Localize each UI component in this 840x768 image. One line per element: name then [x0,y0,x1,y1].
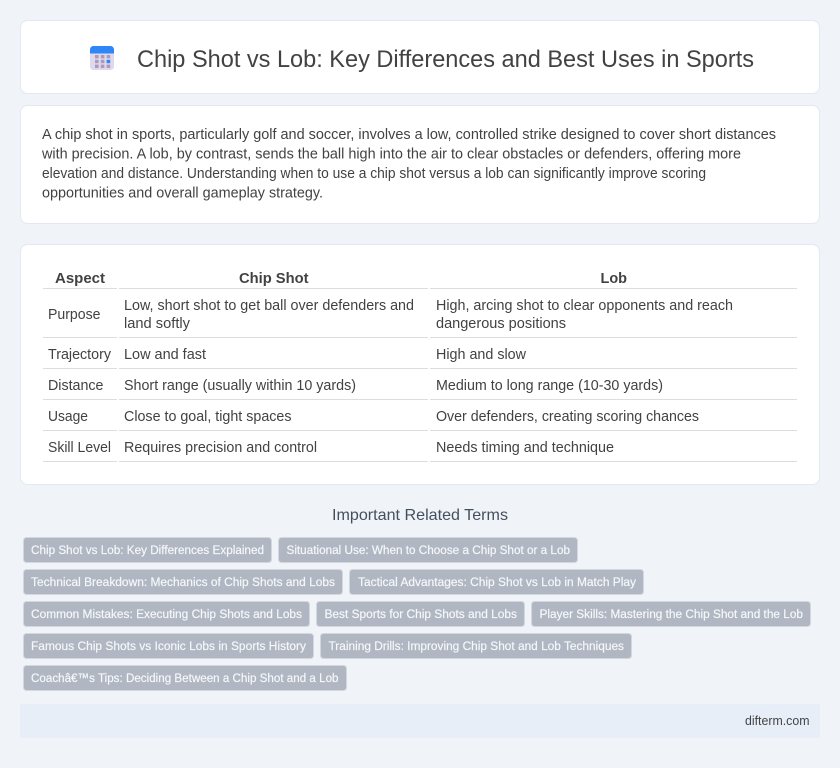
tag: tactical advantages: Tactical Advantages: Chip Shot vs Lob in Match Play [358,575,637,589]
table header row: Aspect [55,270,105,287]
tag: technical breakdown [24,570,342,594]
tag: situational use [278,538,578,562]
table row: purpose: land softly [124,316,191,332]
panel: comparison table [20,244,820,484]
table row: usage: Over defenders, creating scoring chances [436,409,699,425]
tag: coach tips [24,666,346,690]
table row: purpose: dangerous positions [436,316,566,332]
heading: important related terms: Important Related Terms [332,507,508,524]
related term tags [24,538,810,690]
table row: distance [48,378,663,394]
text block: intro paragraph: with precision. A lob, by contrast, sends the ball high into the air to clear obstacles or defenders, offering more [41,146,741,162]
table header row: Chip Shot [239,270,308,287]
icon: calendar [90,46,114,70]
tag: training drills: Training Drills: Improving Chip Shot and Lob Techniques [328,639,624,653]
tag: situational use: Situational Use: When to Choose a Chip Shot or a Lob [286,543,570,557]
text block: intro paragraph: opportunities and overall gameplay strategy. [42,186,323,202]
table row: usage: Close to goal, tight spaces [124,409,292,425]
table header row [55,270,627,287]
table row: purpose: High, arcing shot to clear opponents and reach [436,298,733,314]
tag: key differences: Chip Shot vs Lob: Key Differences Explained [31,543,264,557]
table row: trajectory: Low and fast [124,347,206,363]
table row: purpose [48,298,733,332]
table row: usage: Usage [48,409,88,425]
tag: tactical advantages [350,570,644,594]
tag: player skills [532,602,810,626]
text block: intro paragraph: elevation and distance. Understanding when to use a chip shot versus a lob can significantly improve scoring [42,166,706,182]
table header row: Lob [600,270,627,287]
footer [20,704,820,738]
tag: technical breakdown: Technical Breakdown: Mechanics of Chip Shots and Lobs [31,575,335,589]
title: Chip Shot vs Lob: Key Differences and Best Uses in Sports [137,46,754,73]
footer: difterm.com [745,713,810,728]
table row: distance: Medium to long range (10-30 yards) [436,378,663,394]
tag: common mistakes: Common Mistakes: Executing Chip Shots and Lobs [31,607,302,621]
tag: player skills: Player Skills: Mastering the Chip Shot and the Lob [540,607,803,621]
table row: trajectory: Trajectory [48,347,112,363]
tag: best sports: Best Sports for Chip Shots and Lobs [324,607,517,621]
tag: key differences [24,538,272,562]
table row: usage [48,409,699,425]
tag: training drills [320,634,632,658]
tag: coach tips: Coachâ€™s Tips: Deciding Between a Chip Shot and a Lob [31,671,339,685]
tag: common mistakes [24,602,310,626]
table row: trajectory [48,347,527,363]
table row: skill level [48,440,614,456]
table row: purpose: Purpose [48,307,100,323]
table row: distance: Short range (usually within 10 yards) [124,378,356,394]
table row: distance: Distance [48,378,104,394]
panel: introduction [20,106,820,224]
text block: intro paragraph: A chip shot in sports, particularly golf and soccer, involves a low, controlled strike designed to cover short distances [42,127,776,143]
table row: purpose: Low, short shot to get ball over defenders and [124,298,414,314]
panel: title header [20,20,820,94]
table row: skill level: Needs timing and technique [436,440,614,456]
table row: skill level: Skill Level [48,440,111,456]
table row: skill level: Requires precision and control [124,440,317,456]
tag: famous shots: Famous Chip Shots vs Iconic Lobs in Sports History [31,639,307,653]
tag: famous shots [24,634,314,658]
table row: trajectory: High and slow [436,347,527,363]
tag: best sports [316,602,524,626]
text block: intro paragraph [41,127,776,202]
